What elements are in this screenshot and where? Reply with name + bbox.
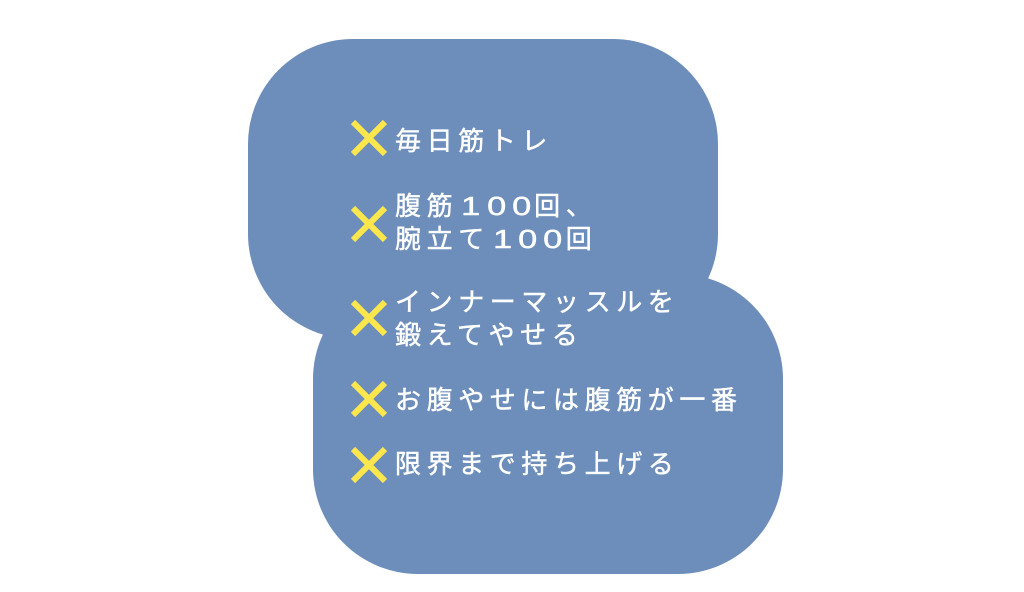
- text: slim down with inner muscles: [395, 287, 679, 350]
- text: 100 sit-ups, 100 push-ups: 0: [487, 191, 506, 221]
- icon: yellow cross 3: [351, 300, 387, 336]
- icon: yellow cross 2: [351, 206, 387, 242]
- panel: upper rounded background: [248, 39, 718, 339]
- text: lift to the limit: 限界まで持ち上げる: [395, 449, 679, 479]
- text: 100 sit-ups, 100 push-ups: 腹筋 回、: [395, 191, 597, 221]
- icon: yellow cross 4: [351, 380, 387, 418]
- text: 100 sit-ups, 100 push-ups: [395, 191, 597, 254]
- icon: yellow cross 5: [351, 446, 387, 484]
- icon: yellow cross 1: [351, 120, 387, 156]
- text: slim down with inner muscles: 鍛えてやせる: [395, 320, 583, 350]
- text: slim down with inner muscles: インナーマッスルを: [395, 287, 679, 317]
- text: 100 sit-ups, 100 push-ups: 0: [512, 191, 531, 221]
- text: 100 sit-ups, 100 push-ups: 0: [543, 224, 563, 254]
- text: 100 sit-ups, 100 push-ups: 0: [518, 224, 537, 254]
- text: every day muscle training: 毎日筋トレ: [395, 126, 553, 156]
- text: sit-ups are best for belly: お腹やせには腹筋が一番: [395, 385, 743, 415]
- text: 100 sit-ups, 100 push-ups: 1: [493, 224, 512, 254]
- panel: lower rounded background: [313, 274, 783, 574]
- text: 100 sit-ups, 100 push-ups: 1: [461, 191, 480, 221]
- text: 100 sit-ups, 100 push-ups: 腕立て 回: [395, 224, 597, 254]
